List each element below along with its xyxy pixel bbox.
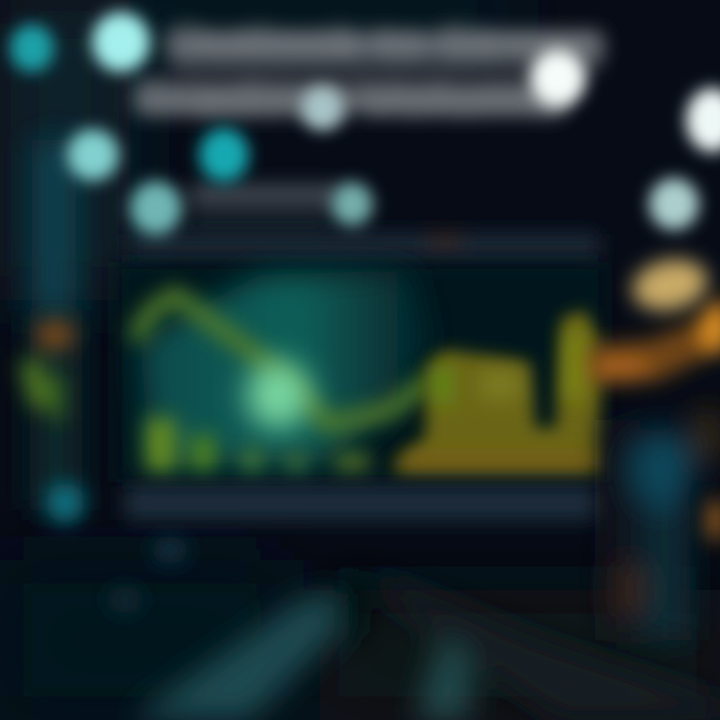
orange ribbon right <box>588 295 720 385</box>
subtitle <box>190 186 340 228</box>
node white title right <box>530 49 586 107</box>
volume highlights <box>400 330 596 469</box>
gold coin <box>628 253 712 317</box>
panel background <box>115 262 605 482</box>
node far right <box>686 88 720 152</box>
title: Outlook to Strong <box>168 18 603 70</box>
glowing nodes <box>10 12 720 235</box>
node left <box>67 129 119 181</box>
title underlay bands <box>135 34 600 112</box>
node subtitle left <box>130 181 182 235</box>
node right <box>649 178 699 230</box>
title: Trading Volume <box>135 72 565 124</box>
left accent marks <box>19 319 188 614</box>
node teal <box>199 128 249 182</box>
perspective road <box>130 567 720 720</box>
header rule of chart <box>130 234 600 262</box>
teal wash <box>140 270 430 465</box>
node bright top <box>92 12 150 72</box>
left column <box>30 140 82 510</box>
figure on right <box>605 410 720 640</box>
node title middle <box>301 86 343 130</box>
small bars <box>146 418 369 472</box>
volume area <box>392 310 600 472</box>
chart footer band <box>125 486 600 520</box>
right orange mark <box>706 498 720 542</box>
node subtitle right <box>331 182 373 226</box>
node cyan far left <box>10 24 54 72</box>
upper green line <box>135 295 430 425</box>
chart panel <box>115 262 605 482</box>
central highlight <box>246 361 310 429</box>
title <box>135 18 603 124</box>
